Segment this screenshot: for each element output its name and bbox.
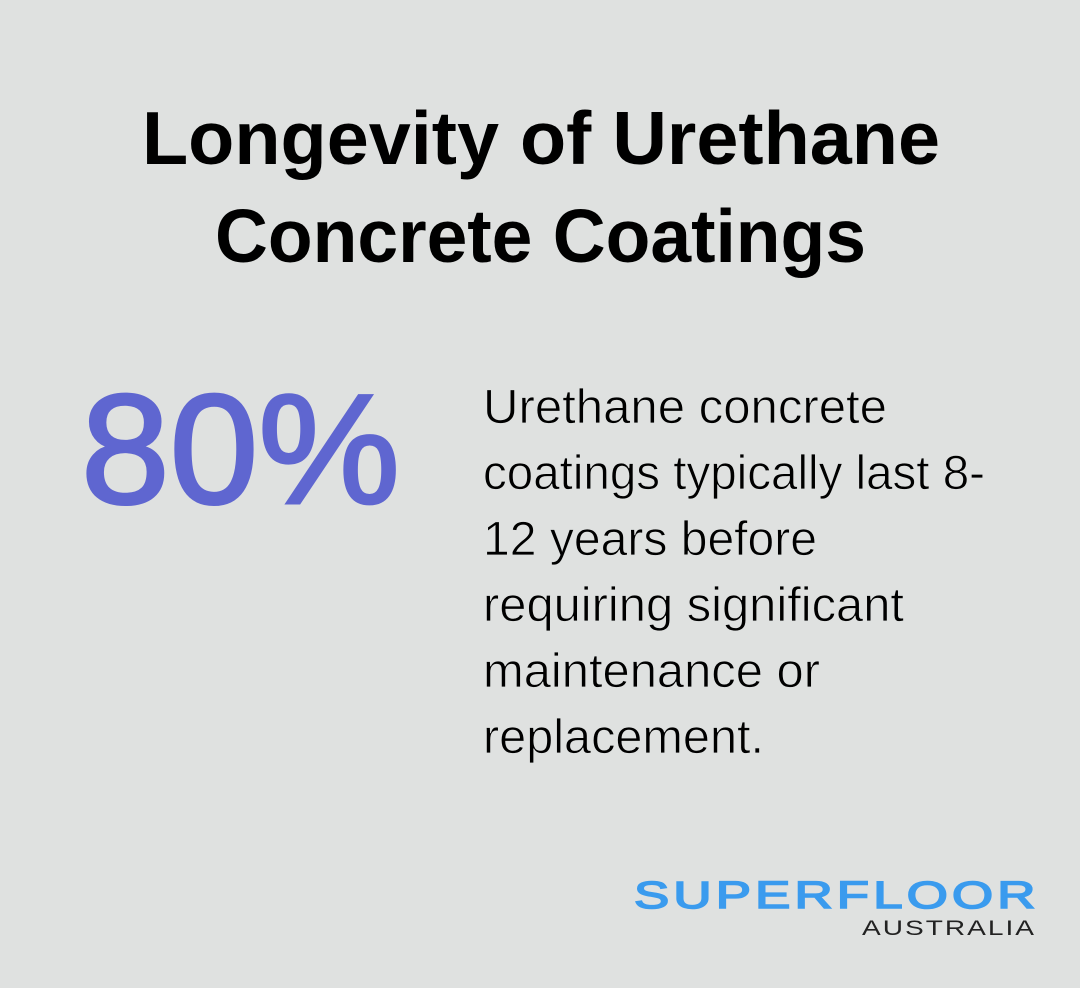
description text: replacement.: [483, 710, 764, 764]
logo: Superfloor Australia: SUPERFLOOR: [634, 873, 1040, 916]
title: Longevity of Urethane: [142, 96, 940, 180]
title: [142, 96, 940, 278]
description text: Urethane concrete: [483, 380, 887, 434]
description text: maintenance or: [483, 644, 820, 698]
description text: [483, 380, 985, 764]
description text: coatings typically last 8-: [483, 446, 985, 500]
logo: Superfloor Australia: [634, 873, 1040, 940]
description text: 12 years before: [483, 512, 817, 566]
logo: Superfloor Australia: AUSTRALIA: [862, 917, 1036, 940]
description text: requiring significant: [483, 578, 905, 632]
title: Concrete Coatings: [215, 194, 866, 278]
big statistic: 80%: 80%: [81, 363, 400, 537]
